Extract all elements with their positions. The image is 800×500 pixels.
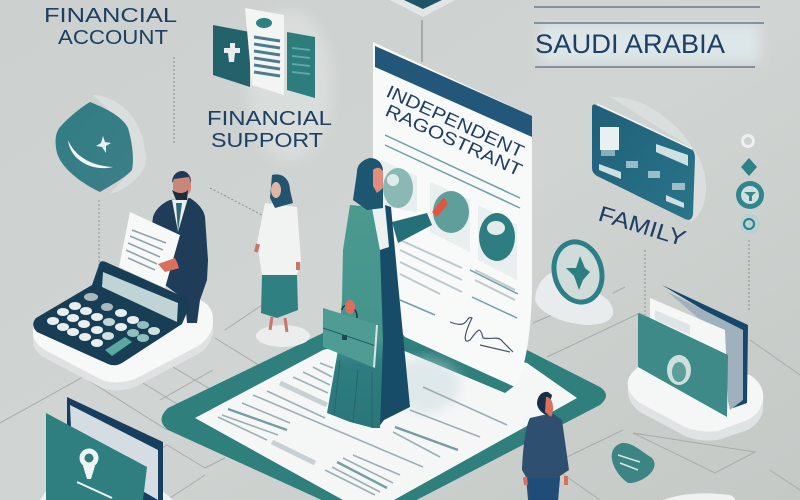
coat — [327, 205, 383, 428]
heading: financial account: FINANCIAL — [44, 5, 177, 27]
teal strip under paper — [395, 328, 517, 393]
dotted connector lines — [99, 20, 749, 315]
hijab — [353, 158, 383, 210]
icon: bank card — [592, 97, 706, 222]
document lines — [400, 240, 515, 300]
figure: woman in white coat — [256, 174, 310, 347]
signature — [450, 318, 513, 352]
icon: small teal tag — [612, 443, 655, 483]
icon: bottom-right pedestal — [663, 493, 735, 500]
sleeve and hand — [392, 213, 432, 243]
tablet base — [162, 298, 606, 500]
icon: folder on pedestal — [628, 285, 763, 440]
icon: small circle on pedestal — [535, 233, 613, 325]
heading: financial account: ACCOUNT — [58, 27, 168, 49]
heading: financial support: FINANCIAL — [207, 108, 332, 130]
document title: INDEPENDENT — [383, 81, 527, 162]
heading: saudi arabia: SAUDI ARABIA — [535, 29, 725, 59]
document title: RAGOSTRANT — [382, 100, 525, 180]
briefcase — [323, 306, 378, 368]
document title — [382, 81, 527, 180]
heading: financial support: SUPPORT — [211, 130, 323, 152]
large document — [373, 42, 532, 387]
icon column — [736, 136, 764, 234]
figure: man holding document — [119, 171, 208, 323]
pedestal: calculator base — [33, 300, 213, 390]
document rules — [385, 135, 520, 318]
document panel icons — [381, 160, 517, 280]
heading: family: FAMILY — [596, 201, 689, 251]
heading: financial account — [44, 5, 177, 49]
calculator — [33, 261, 189, 365]
tablet text lines — [218, 363, 507, 495]
navy underdress — [376, 205, 410, 428]
woman shadow — [390, 357, 460, 413]
icon: folder bottom-left — [40, 397, 173, 500]
icon: emblem diamond top — [390, 0, 455, 17]
heading: saudi arabia — [534, 7, 764, 67]
figure: central woman in hijab with briefcase — [323, 158, 448, 428]
floor tile lines — [0, 287, 800, 500]
icon: shield with crescent — [56, 95, 146, 194]
figure: man in suit at bottom — [522, 392, 569, 500]
icon: financial support booklet — [213, 8, 332, 160]
heading: financial support — [207, 108, 332, 152]
